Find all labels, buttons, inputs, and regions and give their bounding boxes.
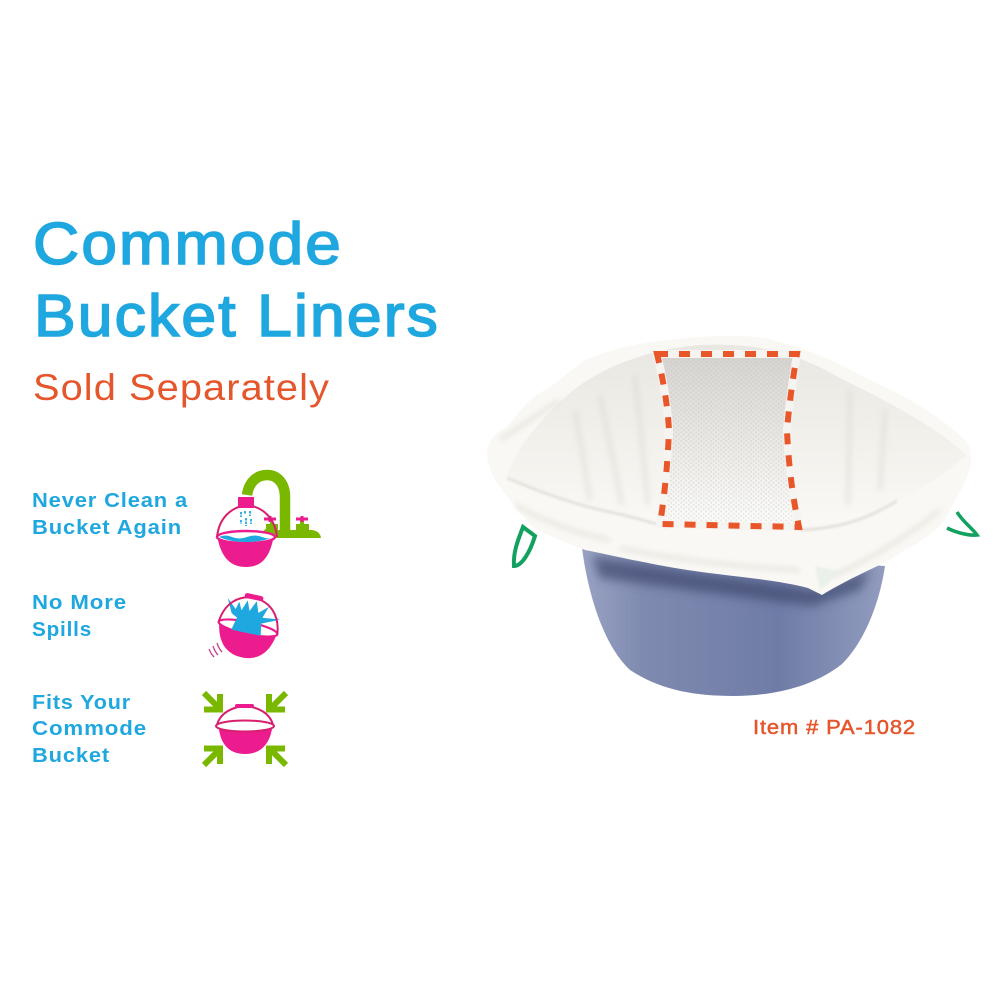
liner corner tab [815, 566, 842, 590]
feature label: fits your commode bucket [32, 691, 147, 767]
green loop right [947, 512, 977, 535]
title: Bucket Liners [34, 283, 440, 349]
feature label: fits your commode bucket: Bucket [32, 744, 110, 767]
title [33, 211, 440, 349]
product photo: lined commode bucket [487, 336, 977, 696]
feature: fits your commode bucket [32, 691, 286, 767]
shadow below liner [592, 556, 870, 606]
absorbent pad [657, 354, 799, 527]
feature: no more spills [32, 589, 284, 664]
feature label: never clean [32, 489, 188, 539]
liner interior [507, 345, 966, 530]
feature label: never clean: Bucket Again [32, 516, 182, 539]
feature label: fits your commode bucket: Fits Your [32, 691, 131, 714]
feature label: no more spills: Spills [32, 618, 92, 641]
icon: bucket under faucet [217, 475, 321, 567]
feature label: no more spills: No More [32, 591, 127, 614]
orange dashed outline [657, 354, 799, 527]
feature: never clean a bucket again [32, 475, 321, 567]
green loop left [514, 527, 535, 566]
blue bucket body [582, 548, 885, 696]
title: Commode [33, 211, 343, 277]
icon: tilted bucket with splash [212, 589, 284, 664]
feature label: fits your commode bucket: Commode [32, 717, 147, 740]
subtitle: Sold Separately [33, 367, 330, 408]
item number: Item # PA-1082 [753, 717, 916, 739]
icon: motion lines [209, 643, 222, 657]
icon: bucket with inward arrows [204, 693, 286, 765]
feature label: no more spills [32, 591, 127, 641]
white liner outer [487, 336, 971, 595]
feature label: never clean: Never Clean a [32, 489, 188, 512]
liner folds [500, 375, 940, 575]
